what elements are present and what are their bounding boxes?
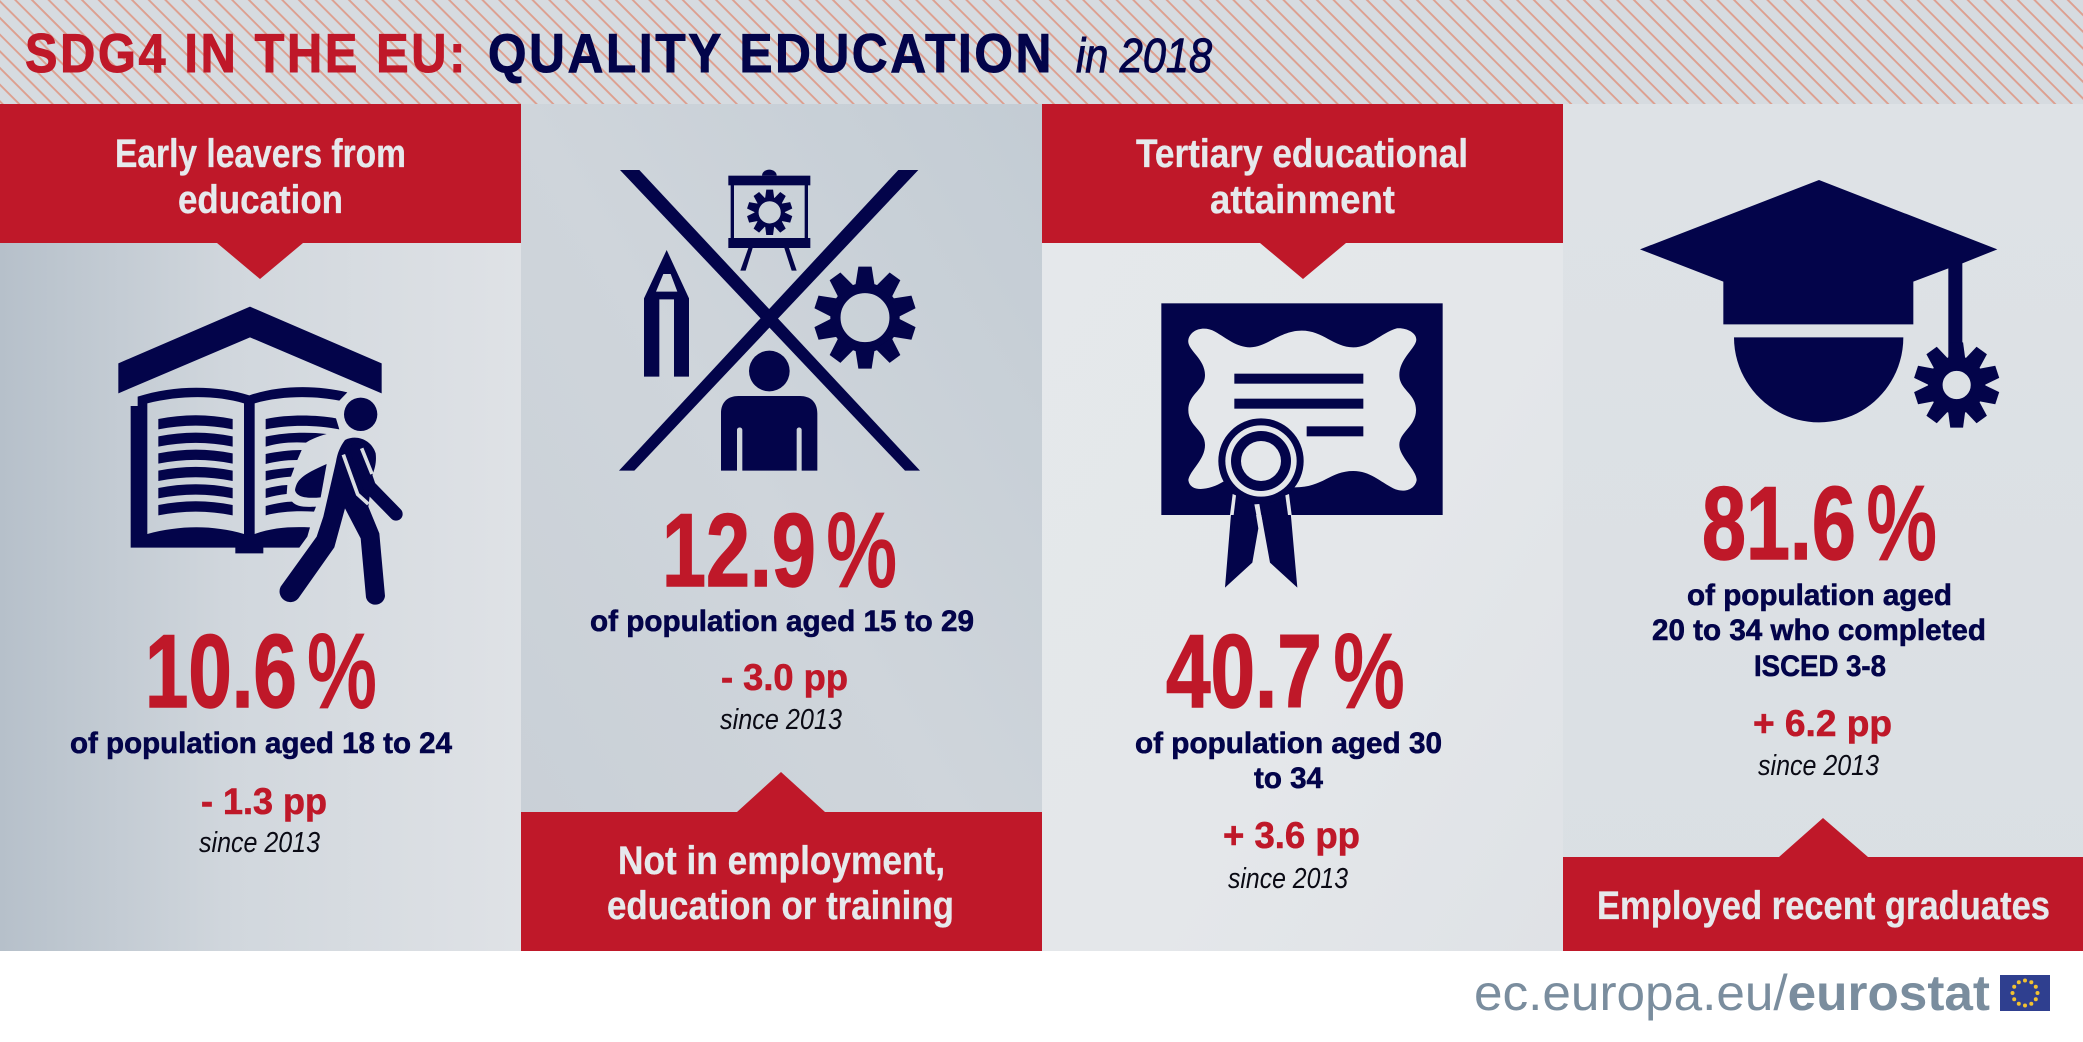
- panel: not in employment, education or training: [521, 104, 1042, 951]
- red heading banner: attainment: [1210, 178, 1395, 222]
- text: population: of population aged 30: [1135, 727, 1442, 760]
- icon: book in a house with person walking away: [118, 307, 396, 605]
- change in percentage points: - 1.3 pp: [201, 781, 327, 822]
- red heading banner: Tertiary educational: [1136, 132, 1468, 176]
- small gear on the easel: [747, 190, 793, 235]
- title: QUALITY EDUCATION: [488, 22, 1054, 84]
- icon: graduation cap with gear tassel: [1640, 180, 2000, 428]
- icon: diploma with rosette: [1161, 303, 1443, 588]
- panel background: [0, 104, 521, 951]
- red heading banner: Early leavers from: [115, 132, 406, 176]
- large gear: [813, 267, 916, 369]
- change in percentage points: + 3.6 pp: [1223, 815, 1360, 856]
- title: SDG4 IN THE EU:: [25, 22, 468, 84]
- since year: since 2013: [199, 827, 320, 859]
- text: population: of population aged 18 to 24: [70, 727, 452, 760]
- text: population: 20 to 34 who completed: [1652, 614, 1986, 647]
- panel: early leavers from education: [0, 104, 521, 951]
- panel background: [521, 104, 1042, 951]
- footer: eurostat web address: ec.europa.eu/eurostat: [1474, 965, 1990, 1021]
- stat: 12.9%: 12.9%: [662, 491, 897, 609]
- panel: tertiary educational attainment: [1042, 104, 1563, 951]
- text: population: of population aged 15 to 29: [590, 605, 974, 638]
- text: population: [1135, 727, 1442, 795]
- change in percentage points: - 3.0 pp: [721, 657, 848, 698]
- stat: 40.7%: 40.7%: [1166, 613, 1405, 729]
- icon: crossed-out training, skills and employment: [619, 170, 920, 471]
- red heading banner: [0, 104, 521, 279]
- red heading banner: [1563, 818, 2083, 951]
- panel background: [1563, 104, 2083, 951]
- text: population: to 34: [1254, 762, 1323, 795]
- panel background: [1042, 104, 1563, 951]
- icon: EU flag: [2000, 975, 2050, 1011]
- red heading banner: [1042, 104, 1563, 279]
- change in percentage points: + 6.2 pp: [1753, 703, 1892, 744]
- red heading banner: education or training: [607, 884, 954, 928]
- stat: 81.6%: 81.6%: [1702, 464, 1937, 582]
- title: [25, 22, 1212, 84]
- text: population: [1652, 579, 1986, 683]
- header band: striped background: [0, 0, 2083, 104]
- stat: 10.6%: 10.6%: [145, 614, 377, 730]
- text: population: of population aged: [1687, 579, 1952, 612]
- panel: employed recent graduates: [1563, 104, 2083, 951]
- red heading banner: [521, 772, 1042, 951]
- text: population: ISCED 3-8: [1754, 650, 1886, 683]
- red heading banner: Not in employment,: [618, 839, 945, 883]
- gear: [1913, 342, 2000, 428]
- title: in 2018: [1076, 30, 1212, 83]
- since year: since 2013: [1758, 750, 1879, 782]
- red heading banner: education: [178, 178, 343, 222]
- since year: since 2013: [720, 704, 842, 736]
- since year: since 2013: [1228, 863, 1348, 895]
